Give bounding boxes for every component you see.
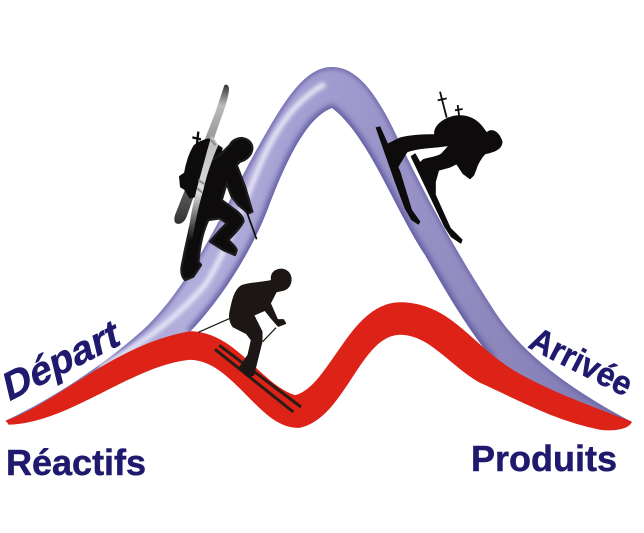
label: Départ: Départ [0, 310, 123, 411]
rear ski on backpack [174, 85, 229, 224]
climbing skier silhouette [174, 85, 257, 280]
backpack [180, 139, 222, 197]
skier body and head [230, 270, 291, 377]
purple band: uncatalysed high-energy path [5, 67, 632, 424]
red band: catalysed low-energy path [7, 303, 631, 430]
poles [198, 318, 276, 342]
front ski [376, 127, 420, 224]
climber body [181, 138, 252, 280]
skier on lower red path [198, 270, 301, 412]
crossed pole tip on backpack [192, 132, 201, 147]
climbing pole [247, 212, 257, 239]
label: Produits: Produits [471, 438, 617, 479]
descender body [387, 116, 502, 243]
skis [215, 345, 301, 412]
infographic: energy diagram with skiers [4, 67, 632, 476]
label: Arrivée: Arrivée [524, 319, 639, 403]
long front ski, silver section [188, 135, 218, 240]
descending skier silhouette [376, 92, 502, 243]
pole tips [438, 92, 463, 118]
ski bindings [197, 140, 216, 193]
label: Réactifs: Réactifs [6, 442, 146, 483]
